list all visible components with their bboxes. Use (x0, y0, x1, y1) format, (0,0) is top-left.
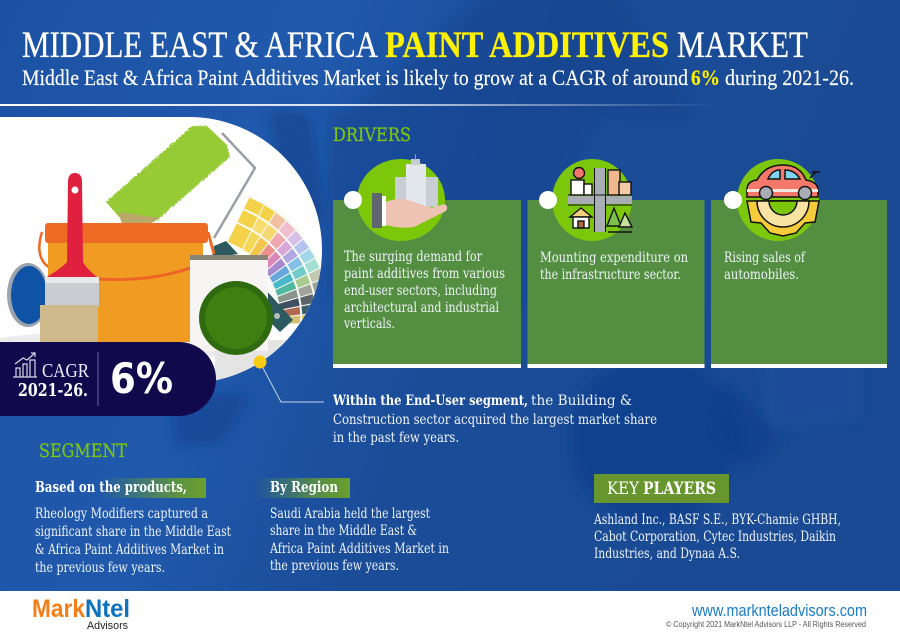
logo: MarkNtel Advisors (32, 595, 130, 632)
text block: region (255, 478, 449, 574)
header: title: MIDDLE EAST & AFRICA (22, 25, 378, 66)
footer (0, 591, 900, 638)
panel: driver 2: the infrastructure sector. (540, 267, 681, 283)
text block: key players (593, 474, 841, 562)
panel: driver 3: Rising sales of (724, 250, 806, 266)
text block: end-user segment (332, 393, 657, 446)
panel: driver 1: architectural and industrial (344, 300, 499, 316)
footer: www.marknteladvisors.com (691, 601, 867, 620)
panel: driver 1 (333, 154, 521, 368)
text block: region: Africa Paint Additives Market in (269, 541, 449, 557)
header: subtitle: during 2021-26. (725, 65, 854, 90)
text block: products: significant share in the Middle East (35, 524, 231, 540)
icon: car on gear (747, 165, 820, 236)
logo: MarkNtel Advisors: Ntel (85, 595, 130, 623)
icon: growth chart (13, 353, 37, 377)
text block: products: the previous few years. (35, 560, 165, 576)
panel: driver 2 (528, 159, 704, 368)
text block: region: the previous few years. (270, 558, 399, 574)
blue lid (7, 263, 49, 327)
text block: region: share in the Middle East & (270, 523, 417, 539)
heading: drivers: DRIVERS (333, 124, 411, 146)
CAGR badge: 6% (110, 354, 173, 403)
paint brush (45, 173, 98, 278)
text block: key players: Ashland Inc., BASF S.E., BYK-Chamie GHBH, (593, 512, 841, 528)
header: title: PAINT ADDITIVES (385, 25, 669, 66)
heading: segment: SEGMENT (39, 440, 127, 462)
roller sleeve (106, 126, 230, 220)
icon: city infrastructure (568, 168, 632, 232)
panel: driver 1: verticals. (343, 316, 395, 332)
footer: © Copyright 2021 MarkNtel Advisors LLP - All Rights Reserved (666, 620, 866, 629)
text block: key players: PLAYERS (643, 479, 716, 499)
swatch fan (227, 195, 322, 324)
CAGR badge: 2021-26. (18, 381, 88, 401)
text block: end-user segment: the Building & (531, 393, 632, 409)
header: title: MARKET (677, 25, 808, 66)
panel: driver 3: automobiles. (724, 267, 799, 283)
text block: key players: KEY (607, 479, 640, 499)
bucket (38, 232, 48, 268)
text block: end-user segment: Within the End-User segment, (332, 393, 528, 409)
text block: products: Rheology Modifiers captured a (35, 506, 208, 522)
logo: MarkNtel Advisors: Mark (32, 595, 85, 623)
CAGR badge: CAGR (42, 360, 90, 382)
text block: products (35, 478, 231, 576)
header: subtitle: Middle East & Africa Paint Additives Market is likely to grow at a CAGR of around (22, 65, 688, 90)
text block: products: & Africa Paint Additives Market in (35, 542, 224, 558)
CAGR badge (0, 342, 216, 416)
text block: products: Based on the products, (35, 479, 187, 496)
icon: hand holding buildings (372, 154, 447, 228)
panel: paint products photo (0, 117, 332, 383)
paint roller frame (214, 133, 255, 238)
text block: region: By Region (270, 479, 338, 496)
text block: end-user segment: in the past few years. (333, 430, 459, 446)
panel: driver 1: paint additives from various (344, 266, 505, 282)
text block: key players: Cabot Corporation, Cytec Industries, Daikin (594, 529, 836, 545)
panel: driver 1: The surging demand for (344, 249, 482, 265)
text block: end-user segment: Construction sector acquired the largest market share (333, 412, 657, 428)
green lid (199, 281, 273, 355)
white tin (190, 255, 268, 351)
logo: MarkNtel Advisors: Advisors (87, 620, 128, 632)
panel: driver 3 (711, 159, 887, 368)
panel: driver 2: Mounting expenditure on (540, 250, 688, 266)
text block: region: Saudi Arabia held the largest (270, 506, 430, 522)
header: subtitle: 6% (691, 65, 720, 90)
header: title (22, 25, 808, 66)
panel: driver 1: end-user sectors, including (344, 283, 497, 299)
text block: key players: Industries, and Dynaa A.S. (594, 546, 740, 562)
callout connector (254, 356, 324, 402)
